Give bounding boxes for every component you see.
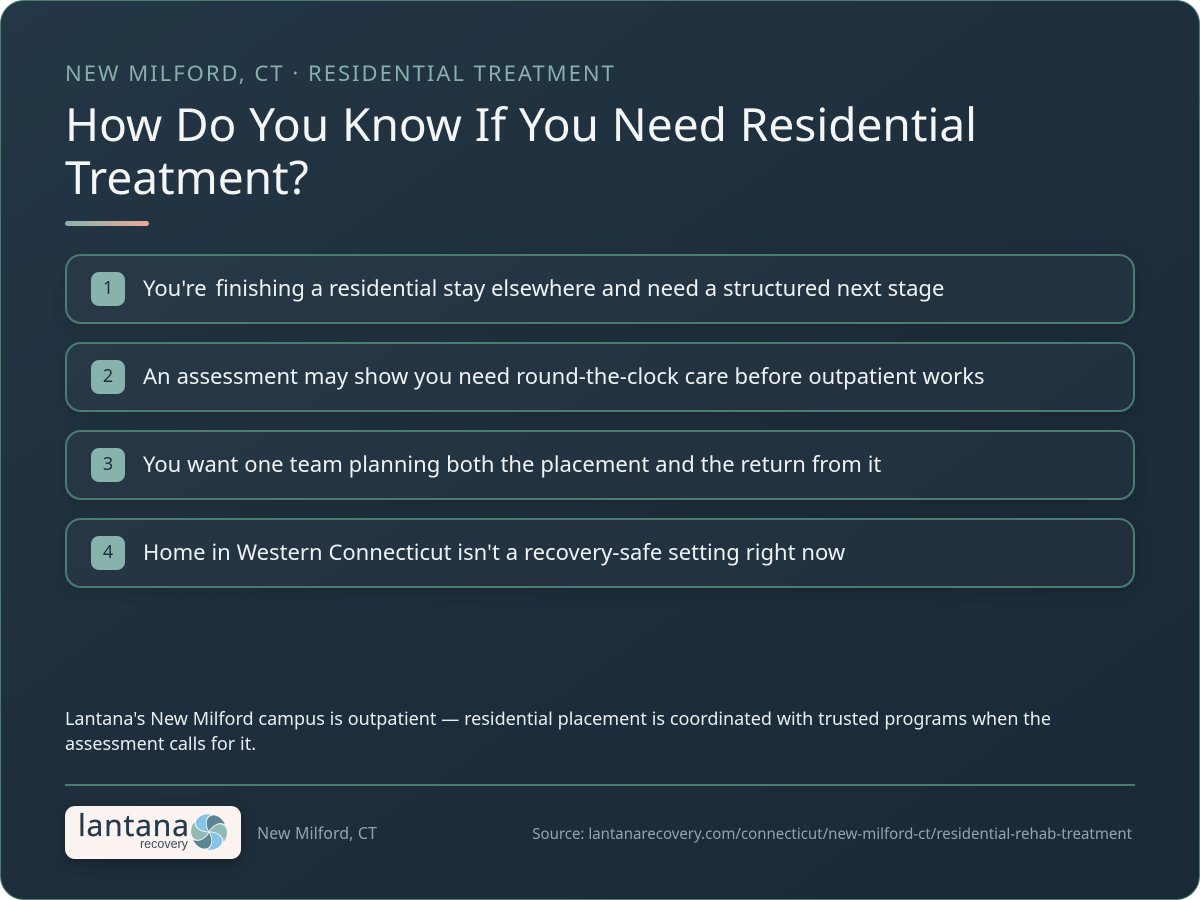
number badge 1 bbox=[91, 272, 125, 306]
number badge 3: 3 bbox=[103, 452, 113, 476]
item 1 text: You're finishing a residential stay elsewhere and need a structured next stage bbox=[143, 273, 944, 303]
number badge 4 bbox=[91, 536, 125, 570]
list item 4 bbox=[65, 518, 1135, 588]
number badge 2 bbox=[91, 360, 125, 394]
item 4 text: Home in Western Connecticut isn't a recovery-safe setting right now bbox=[143, 537, 845, 567]
location label: New Milford, CT bbox=[257, 822, 377, 844]
item 2 text: An assessment may show you need round-the-clock care before outpatient works bbox=[143, 361, 985, 391]
number badge 4: 4 bbox=[103, 540, 113, 564]
note: Lantana's New Milford campus is outpatient — residential placement is coordinated with trusted programs when the assessment calls for it. bbox=[65, 707, 1051, 756]
title: How Do You Know If You Need Residential bbox=[65, 93, 977, 155]
logo bbox=[65, 806, 241, 859]
logo subtext: recovery bbox=[140, 837, 188, 851]
number badge 3 bbox=[91, 448, 125, 482]
source: Source: lantanarecovery.com/connecticut/new-milford-ct/residential-rehab-treatment bbox=[532, 824, 1132, 844]
list item 3 bbox=[65, 430, 1135, 500]
icon: pinwheel bbox=[191, 814, 227, 850]
footer divider bbox=[65, 784, 1135, 786]
list item 1 bbox=[65, 254, 1135, 324]
item 3 text: You want one team planning both the placement and the return from it bbox=[143, 449, 881, 479]
title: Treatment? bbox=[65, 146, 309, 208]
eyebrow: NEW MILFORD, CT · RESIDENTIAL TREATMENT bbox=[65, 58, 616, 88]
list item 2 bbox=[65, 342, 1135, 412]
number badge 2: 2 bbox=[103, 364, 113, 388]
accent bar bbox=[65, 221, 149, 226]
number badge 1: 1 bbox=[103, 276, 113, 300]
title bbox=[65, 93, 977, 208]
